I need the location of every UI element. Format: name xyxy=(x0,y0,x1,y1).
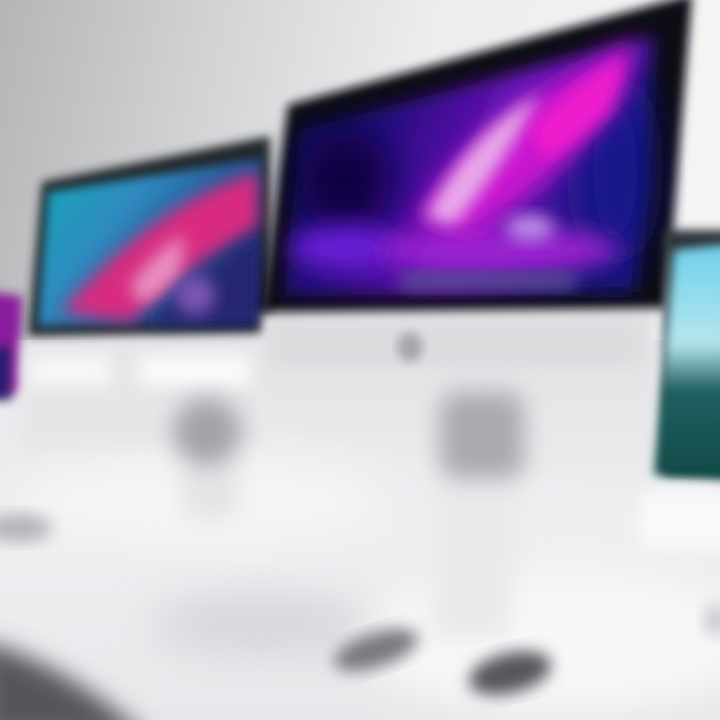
right mouse xyxy=(704,604,720,636)
right monitor bezel xyxy=(664,230,720,475)
main monitor xyxy=(262,0,692,640)
main monitor stand xyxy=(430,392,524,640)
left monitor stand xyxy=(173,398,241,520)
right monitor screen xyxy=(654,244,720,480)
main monitor chin xyxy=(262,306,654,490)
left monitor screen xyxy=(38,158,262,326)
right monitor xyxy=(640,230,720,550)
white desk xyxy=(0,340,720,720)
small monitor: far-left purple edge xyxy=(0,292,22,402)
logo on chin xyxy=(397,332,423,362)
left monitor bezel xyxy=(28,136,270,336)
main monitor screen xyxy=(284,35,655,296)
front mouse xyxy=(464,643,556,703)
main monitor bezel xyxy=(262,0,692,312)
left mouse xyxy=(0,514,52,542)
left monitor xyxy=(20,136,270,520)
right monitor base xyxy=(640,490,720,550)
centre mouse xyxy=(329,620,423,680)
left monitor chin xyxy=(20,330,262,450)
background wall xyxy=(0,0,720,420)
desk accessories xyxy=(0,514,720,703)
